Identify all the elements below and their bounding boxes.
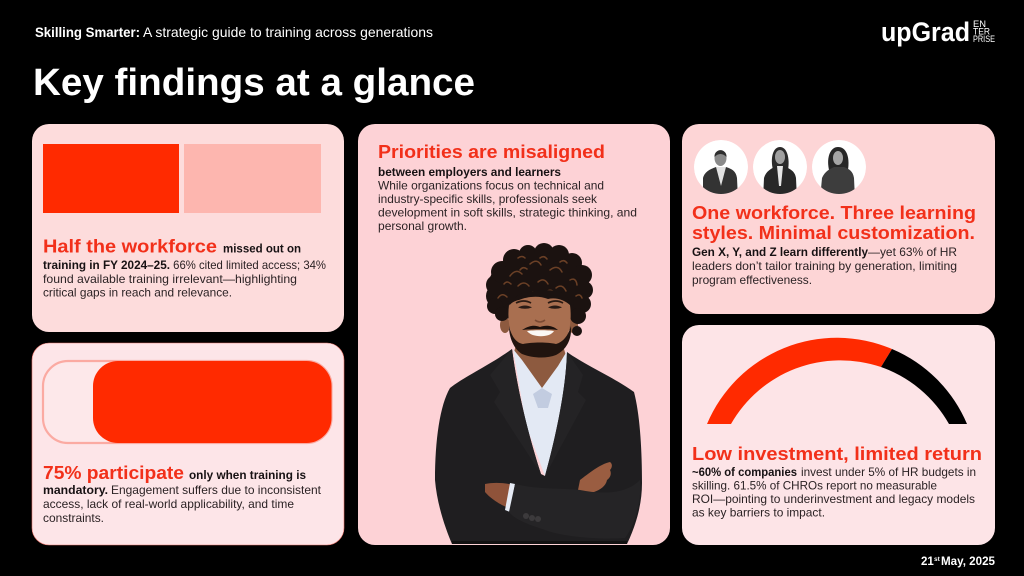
text: one workforce: One workforce. Three learning: [692, 202, 976, 223]
text: half the workforce: missed out on: [223, 242, 301, 256]
text: 75% participate: access, lack of real-world applicability, and time: [43, 497, 294, 511]
progress pill: 75 percent: [43, 361, 332, 443]
text: low investment: ROI—pointing to underinvestment and legacy models: [692, 492, 975, 506]
portrait: Gen X man: [694, 140, 748, 200]
bar: remaining share: [184, 144, 321, 213]
hair mass: [486, 243, 593, 336]
text: one workforce: —yet 63% of HR: [868, 245, 957, 259]
text: half the workforce: training in FY 2024–25.: [43, 258, 170, 272]
text: priorities: While organizations focus on technical and: [378, 178, 604, 192]
nose: [535, 320, 545, 322]
header tagline: Skilling Smarter:: [35, 25, 140, 40]
text: one workforce: [692, 202, 976, 287]
text: 75% participate: [43, 462, 322, 525]
text: priorities: industry-specific skills, professionals seek: [378, 192, 598, 206]
date: 21: [921, 556, 934, 568]
title: Key findings at a glance: [33, 62, 475, 104]
text: 75% participate: only when training is: [189, 468, 306, 482]
text: priorities: [378, 141, 637, 233]
text: 75% participate: 75% participate: [43, 462, 184, 483]
illustration: smiling professional with crossed arms: [435, 243, 642, 544]
shirt: [513, 349, 572, 476]
panel: one workforce: [682, 124, 995, 314]
portrait: Gen Z woman: [812, 140, 866, 200]
portrait: Gen Y woman: [753, 140, 807, 200]
eyebrows: [516, 301, 531, 303]
text: priorities: development in soft skills, strategic thinking, and: [378, 206, 637, 220]
beard: [509, 326, 571, 358]
ears: [500, 317, 510, 333]
text: low investment: Low investment, limited return: [692, 443, 982, 464]
panel: 75% participate: [32, 343, 344, 545]
header tagline: A strategic guide to training across generations: [143, 25, 433, 40]
fringe: [509, 290, 571, 306]
gauge chart: [707, 338, 967, 424]
text: low investment: as key barriers to impact.: [692, 506, 825, 520]
smile: [527, 330, 554, 336]
logo: upGrad Enterprise: upGrad: [881, 17, 970, 47]
hair highlights: [498, 256, 582, 298]
eyes: [518, 306, 562, 309]
date: st: [934, 556, 941, 563]
panel: priorities are misaligned: [358, 124, 670, 545]
text: low investment: skilling. 61.5% of CHROs report no measurable: [692, 478, 937, 492]
logo: upGrad Enterprise: PRISE: [973, 34, 995, 44]
bar: missed training share: [43, 144, 179, 213]
text: half the workforce: 66% cited limited access; 34%: [170, 258, 326, 272]
text: priorities: between employers and learners: [378, 165, 561, 179]
text: 75% participate: Engagement suffers due to inconsistent: [111, 483, 322, 497]
right hand: [578, 462, 612, 492]
logo: upGrad Enterprise: TER: [973, 26, 990, 36]
crossed forearm: [509, 480, 640, 539]
jacket buttons: [523, 513, 541, 522]
text: one workforce: program effectiveness.: [692, 273, 812, 287]
jacket: [435, 349, 642, 544]
panel: half the workforce: [32, 124, 344, 332]
text: priorities: Priorities are misaligned: [378, 141, 605, 162]
moustache: [522, 326, 558, 330]
text: 75% participate: constraints.: [43, 511, 104, 525]
neck: [514, 335, 566, 390]
lapels: [490, 349, 541, 474]
text: one workforce: styles. Minimal customization.: [692, 222, 975, 243]
face: [508, 296, 571, 356]
text: half the workforce: found available training irrelevant—highlighting: [43, 272, 297, 286]
date: May, 2025: [941, 556, 996, 568]
text: half the workforce: critical gaps in reach and relevance.: [43, 286, 232, 300]
panel: low investment: [682, 325, 995, 545]
text: one workforce: leaders don’t tailor training by generation, limiting: [692, 259, 957, 273]
text: priorities: personal growth.: [378, 219, 467, 233]
text: one workforce: Gen X, Y, and Z learn differently: [692, 245, 868, 259]
left hand: [485, 483, 514, 508]
text: half the workforce: Half the workforce: [43, 236, 217, 256]
text: low investment: invest under 5% of HR budgets in: [801, 465, 976, 479]
white cuff: [505, 483, 515, 512]
text: half the workforce: [43, 236, 326, 300]
text: low investment: ~60% of companies: [692, 465, 797, 479]
text: 75% participate: mandatory.: [43, 483, 108, 497]
jacket bottom shadow: [452, 541, 627, 544]
text: low investment: [692, 443, 982, 520]
logo: upGrad Enterprise: EN: [973, 19, 986, 29]
